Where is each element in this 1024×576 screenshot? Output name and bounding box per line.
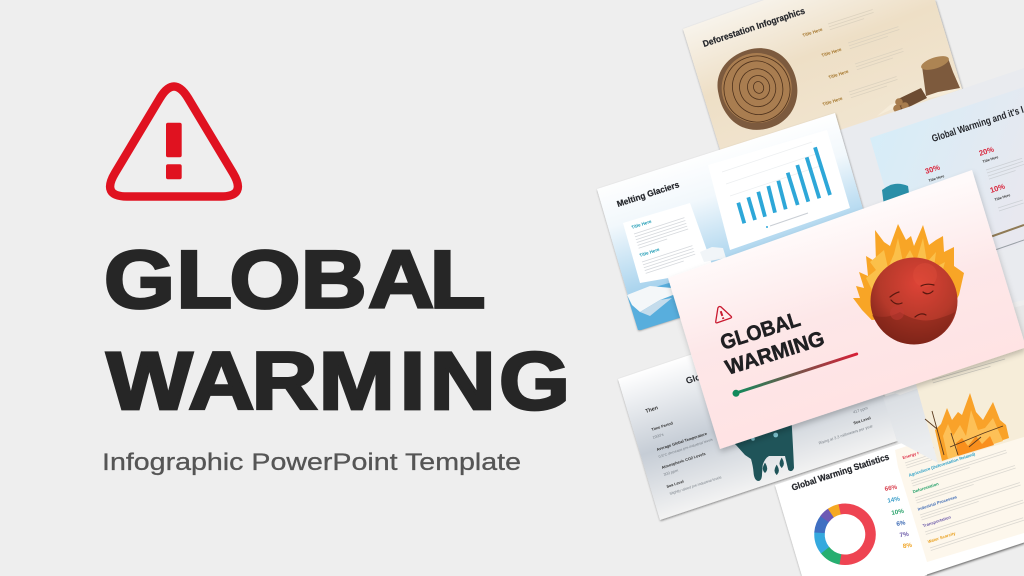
impact stats [924,145,1024,211]
deforestation list: Title Here [822,96,844,107]
then column: 300 ppm [663,468,679,477]
icon: melting earth [730,424,794,481]
deforestation list [802,9,904,107]
then column: 1900's [652,432,664,440]
glaciers heading: Melting Glaciers [616,179,681,209]
impact slide bar [990,225,1024,237]
sources panel: Industrial Processes [917,494,958,512]
title: GLOBAL [104,235,486,325]
sources panel: Deforestation [912,481,940,494]
subtitle: Infographic PowerPoint Template [102,449,521,476]
impact stats: Title Here [928,174,945,183]
sources panel [895,407,1024,562]
percentage list: 10% [891,508,905,517]
planet face [890,284,934,317]
panel: deforestation slide [683,0,962,172]
icon: small warning triangle [711,304,732,323]
sources panel: Agriculture (Deforestation Related) [908,451,976,478]
icon: iceberg [627,247,726,330]
sources panel: Water Scarcity [927,530,957,544]
then column: Average Global Temperature [656,431,708,452]
then column: Sea Level [666,479,684,489]
percentage list: 7% [899,531,910,539]
deforestation heading: Deforestation Infographics [701,6,806,49]
percentage list: 14% [887,496,901,505]
now column: Sea Level [853,415,871,425]
tree branches [925,411,1003,455]
sources panel: Energy Production (Fossil Fuels) [902,435,966,460]
then column: Slightly raised pre-industrial levels [669,475,722,496]
title [104,235,570,427]
temperature slider [732,354,857,397]
then column: Time Period [651,420,674,432]
panel: statistics slide [775,403,1024,576]
percentage list: 6% [896,519,906,528]
now column: 417 ppm [852,405,868,415]
title: WARMING [106,336,570,427]
main slide title: WARMING [723,327,827,380]
impact stats: Title Here [982,155,999,164]
impact stats: 20% [978,145,995,158]
wildfire text lines [932,359,1006,383]
panel: global warming impact slide [840,68,1024,330]
then column [645,405,722,496]
impact stats: Title Here [994,193,1011,202]
text card [623,203,714,283]
main slide title: GLOBAL [718,308,803,355]
icon: burning planet [853,224,964,344]
statistics heading: Global Warming Statistics [790,452,890,493]
now column [818,405,874,445]
statistics slide lower edge [927,543,1024,575]
panel: melting glaciers slide [597,113,876,330]
percentage list [884,484,913,550]
text card: Title Here [639,247,661,258]
text card: Title Here [631,219,653,230]
icon: tree stump and logs [877,53,962,116]
then column: 0.5°C decrease pre-industrial levels [658,438,713,459]
icon: globe [882,184,910,206]
impact stats: 10% [989,182,1006,195]
panel: wildfire slide [883,305,1024,463]
icon: flames [925,393,1009,461]
then column: Then [645,405,659,415]
donut chart [809,499,881,570]
deforestation list: Title Here [828,69,850,80]
percentage list: 8% [902,542,913,550]
deforestation list: Title Here [821,47,843,58]
impact slide lower edge [995,240,1024,250]
deforestation list: Title Here [802,27,824,38]
now column: Rising at 3.3 millimeters per year [818,423,874,445]
sources panel: Transportation [922,514,952,528]
percentage list: 66% [884,484,898,493]
then column: Atmospheric CO2 Levels [661,451,706,470]
impact stats: 30% [924,163,941,176]
bar chart [708,130,850,250]
then and now heading: Global Warming [685,355,753,386]
icon: tree rings [708,38,808,140]
panel: main global warming slide [668,170,1024,449]
icon: warning triangle [110,86,238,196]
panel: then and now slide [618,300,897,520]
